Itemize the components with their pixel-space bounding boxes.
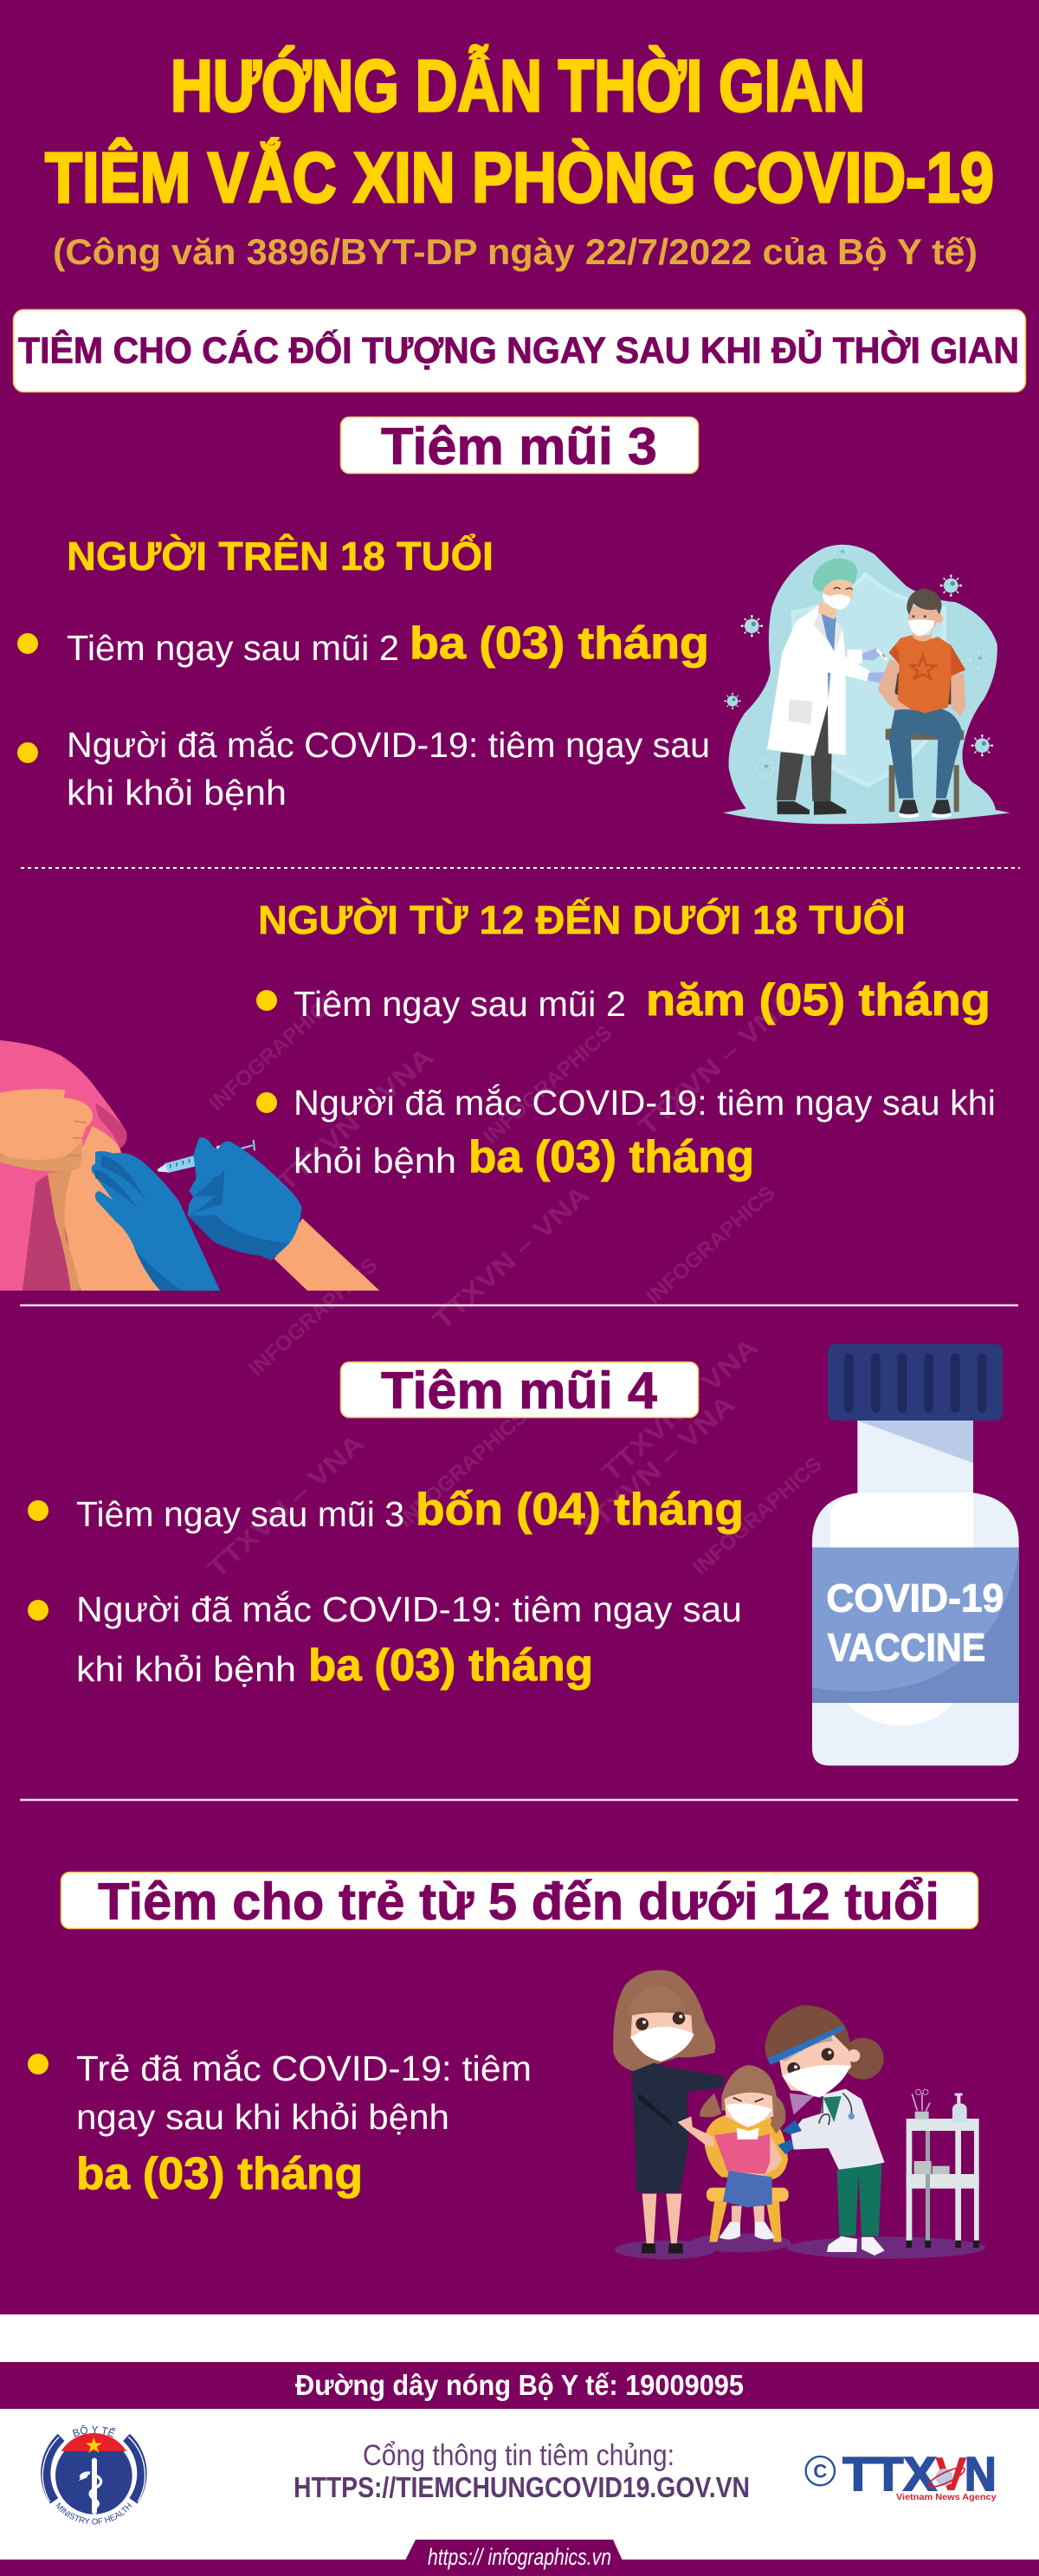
bullet text: ba (03) tháng: [468, 1132, 754, 1182]
bullet dot: [256, 1092, 277, 1113]
bullet text: [294, 975, 991, 1026]
logo: TTXVN: C: [813, 2461, 827, 2482]
solid divider: [20, 1799, 1018, 1801]
banner: inject right after eligible time: [14, 310, 1025, 392]
section: age 12 to under 18: [256, 897, 996, 1182]
bullet text: Trẻ đã mắc COVID-19: tiêm: [76, 2049, 532, 2088]
logo: Ministry of Health: MINISTRY OF HEALTH: [55, 2502, 132, 2524]
bullet text: năm (05) tháng: [646, 975, 991, 1026]
watermarks: INFOGRAPHICS: [479, 1021, 617, 1149]
watermarks: TTXVN – VNA: [597, 1333, 764, 1487]
logo: TTXVN: N: [965, 2447, 997, 2501]
bullet dot: [28, 1500, 48, 1521]
watermarks: INFOGRAPHICS: [244, 1253, 383, 1381]
footer hotline band: Đường dây nóng Bộ Y tế: 19009095: [295, 2369, 744, 2401]
section: over 18: [17, 534, 710, 812]
heading: children 5 to under 12: Tiêm cho trẻ từ 5 đến dưới 12 tuổi: [98, 1873, 939, 1931]
bullet text: khỏi bệnh: [294, 1141, 456, 1181]
vaccination portal text: [294, 2439, 750, 2503]
illustration: vaccine vial: COVID-19: [826, 1576, 1004, 1621]
logo: TTXVN: TTX: [842, 2447, 937, 2501]
bullet text: [67, 725, 710, 812]
heading: dose 4: Tiêm mũi 4: [381, 1362, 658, 1420]
bullet text: ba (03) tháng: [308, 1641, 593, 1691]
section: dose 4 bullets: [28, 1485, 744, 1691]
bullet text: [67, 618, 709, 669]
heading 12-18: NGƯỜI TỪ 12 ĐẾN DƯỚI 18 TUỔI: [258, 897, 906, 942]
footer hotline band: [0, 2362, 1039, 2409]
title: HƯỚNG DẪN THỜI GIAN: [171, 45, 865, 126]
bullet text: Tiêm ngay sau mũi 2: [67, 628, 399, 668]
vaccination portal text: Cổng thông tin tiêm chủng:: [363, 2439, 674, 2472]
subtitle: (Công văn 3896/BYT-DP ngày 22/7/2022 của Bộ Y tế): [53, 231, 978, 272]
solid divider: [20, 1304, 1018, 1306]
bullet text: ba (03) tháng: [410, 618, 709, 669]
bullet dot: [17, 742, 38, 763]
footer website band: https:// infographics.vn: [428, 2544, 611, 2570]
bullet text: ba (03) tháng: [76, 2149, 363, 2199]
bullet dot: [17, 633, 38, 654]
bullet text: [76, 1589, 742, 1691]
watermarks: INFOGRAPHICS: [688, 1453, 827, 1580]
bullet text: Tiêm ngay sau mũi 3: [76, 1494, 404, 1534]
watermarks: INFOGRAPHICS: [642, 1181, 780, 1309]
bullet text: khi khỏi bệnh: [67, 773, 287, 812]
bullet text: [294, 1083, 996, 1182]
watermarks: INFOGRAPHICS: [394, 1405, 532, 1532]
logo: TTXVN: V: [935, 2447, 967, 2501]
watermarks: TTXVN – VNA: [272, 1043, 439, 1197]
banner: inject right after eligible time: TIÊM CHO CÁC ĐỐI TƯỢNG NGAY SAU KHI ĐỦ THỜI GIAN: [18, 329, 1019, 372]
vaccination portal text: HTTPS://TIEMCHUNGCOVID19.GOV.VN: [294, 2471, 750, 2503]
logo: Ministry of Health: BỘ Y TẾ: [73, 2425, 116, 2437]
bullet dot: [256, 990, 277, 1011]
logo: Ministry of Health: [41, 2425, 147, 2524]
watermarks: TTXVN – VNA: [428, 1181, 595, 1335]
illustration: doctor vaccinating patient: [723, 545, 1010, 824]
bullet dot: [28, 1600, 48, 1621]
bullet text: [76, 1485, 744, 1535]
illustration: mother, child and nurse: [613, 1970, 985, 2259]
bullet text: bốn (04) tháng: [416, 1485, 744, 1535]
logo: TTXVN: [806, 2447, 997, 2502]
bullet text: khi khỏi bệnh: [76, 1649, 296, 1689]
watermarks: [203, 987, 827, 1583]
bullet dot: [28, 2054, 48, 2074]
illustration: gloved hands injecting arm: [0, 1040, 379, 1291]
watermarks: INFOGRAPHICS: [204, 988, 343, 1116]
bullet text: Người đã mắc COVID-19: tiêm ngay sau khi: [294, 1083, 996, 1123]
watermarks: TTXVN – VNA: [573, 1390, 740, 1544]
logo: TTXVN: Vietnam News Agency: [896, 2493, 997, 2502]
bullet text: ngay sau khi khỏi bệnh: [76, 2097, 449, 2137]
watermarks: TTXVN – VNA: [203, 1429, 370, 1583]
heading: dose 3: Tiêm mũi 3: [381, 417, 657, 476]
heading over 18: NGƯỜI TRÊN 18 TUỔI: [67, 534, 494, 579]
bullet text: Tiêm ngay sau mũi 2: [294, 984, 626, 1024]
section: children bullet: [28, 2049, 532, 2199]
dashed divider: [21, 867, 1020, 869]
illustration: vaccine vial: VACCINE: [828, 1626, 985, 1670]
bullet text: Người đã mắc COVID-19: tiêm ngay sau: [67, 725, 710, 765]
illustration: vaccine vial: [812, 1344, 1019, 1765]
bullet text: Người đã mắc COVID-19: tiêm ngay sau: [76, 1589, 742, 1629]
title: [45, 45, 994, 217]
watermarks: TTXVN – VNA: [633, 987, 800, 1142]
bullet text: [76, 2049, 532, 2199]
footer website band: [0, 2540, 1039, 2576]
